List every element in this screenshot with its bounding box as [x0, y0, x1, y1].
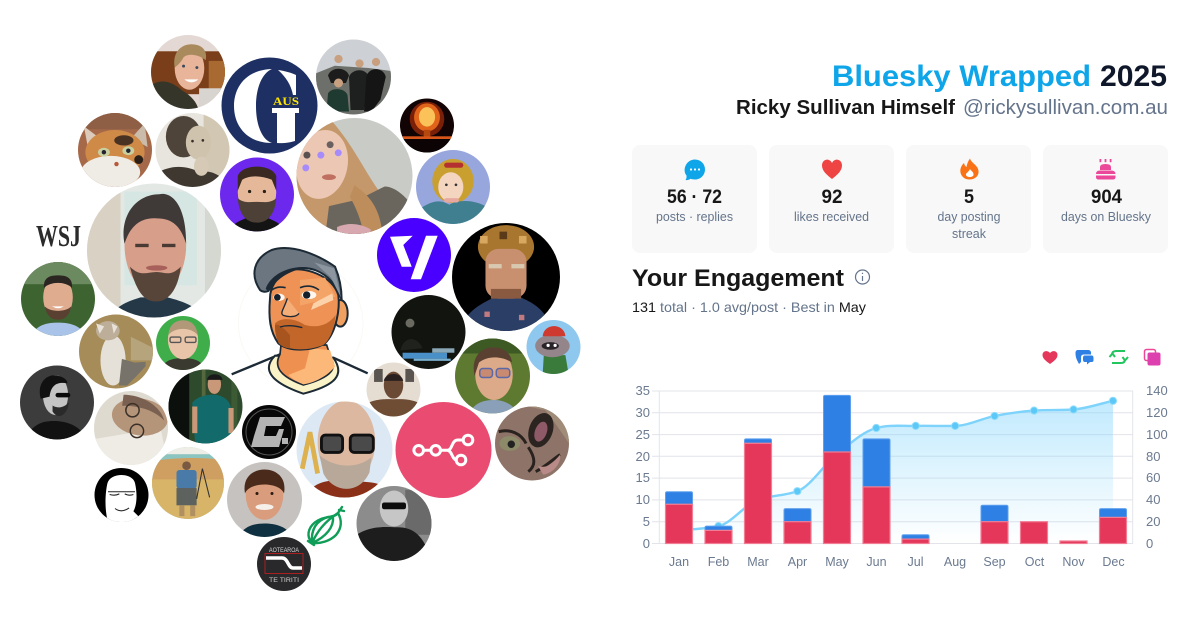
stat: posts replies number: 56 · 72 — [667, 187, 722, 208]
chart: left axis labels: 20 — [636, 449, 650, 464]
stat: streak label: day posting — [938, 209, 1000, 224]
avatar: Aotearoa logo: AOTEAROA — [269, 547, 300, 554]
display name: Ricky Sullivan Himself — [736, 97, 955, 119]
chart: left axis labels: 30 — [636, 405, 650, 420]
header: title and user — [736, 60, 1168, 119]
icon: quotes legend — [1144, 350, 1160, 366]
avatar: pixel art man — [452, 223, 560, 331]
chart: like bars — [666, 443, 1126, 544]
avatar: line drawing of man on black — [94, 468, 148, 523]
chart: right axis labels: 140 — [1146, 383, 1168, 398]
chart: right axis labels — [1146, 383, 1168, 551]
stat: streak label second line: streak — [952, 226, 986, 241]
chart: monthly engagement — [636, 383, 1168, 569]
chart: month labels: Feb — [708, 555, 729, 569]
heading: Your Engagement: Your Engagement — [632, 265, 844, 292]
chart: right axis labels: 20 — [1146, 514, 1160, 529]
card: streak — [906, 145, 1031, 253]
avatar: Guardian Australia logo: AUS — [273, 94, 299, 108]
avatar: illustrated bearded man on purple — [220, 158, 294, 232]
icon: birthday cake — [1096, 159, 1116, 180]
avatar: musician at keyboards in dark — [392, 295, 466, 369]
avatar: man in teal shirt in forest — [168, 370, 242, 444]
avatar: tabby cat looking up — [79, 314, 153, 388]
chart: month labels: Oct — [1025, 555, 1045, 569]
chart: right axis labels: 0 — [1146, 536, 1153, 551]
chart: month labels: Aug — [944, 555, 966, 569]
panel: stat cards — [632, 145, 1168, 253]
chart: left axis labels: 15 — [636, 470, 650, 485]
chart: month labels: Jul — [908, 555, 923, 569]
chart: left axis labels: 5 — [643, 514, 650, 529]
title: year: 2025 — [1100, 60, 1167, 93]
avatar: painted calico cat — [78, 113, 152, 188]
avatar: sideways face with round glasses — [94, 391, 170, 465]
avatar: man with glasses on green screen — [156, 316, 210, 370]
chart: month labels: May — [825, 555, 850, 569]
avatar: monochrome man with shades — [356, 486, 432, 561]
avatar: WSJ wordmark: WSJ — [36, 218, 81, 253]
icon: likes legend — [1042, 351, 1058, 364]
avatar: nuclear explosion — [400, 98, 454, 152]
avatar: cartoon woman with sunglasses — [416, 150, 490, 224]
chart: right axis labels: 40 — [1146, 492, 1160, 507]
chart: month labels: Nov — [1062, 555, 1085, 569]
avatar: man selfie by window shutters — [87, 184, 221, 318]
chart: cumulative line — [679, 401, 1113, 530]
avatar: man in front of frames — [366, 362, 420, 416]
avatar: sepia portrait of man — [156, 113, 230, 187]
avatar: cartoon raccoon in red hat — [526, 320, 580, 374]
icon: info — [856, 270, 870, 284]
icon: speech bubble — [685, 160, 705, 180]
avatar: grey C logo on black — [242, 405, 296, 459]
card: days on Bluesky — [1043, 145, 1168, 253]
card: likes — [769, 145, 894, 253]
chart: month labels — [669, 555, 1125, 569]
avatar: man in camo shirt — [151, 35, 225, 109]
icon: green onion logo — [308, 507, 344, 545]
chart: left axis labels: 35 — [636, 383, 650, 398]
avatar: band of four men on rocks — [316, 40, 391, 114]
chart: left axis labels: 25 — [636, 427, 650, 442]
chart: month labels: Apr — [788, 555, 807, 569]
avatar: photographer in kilt in wheat field — [152, 447, 224, 519]
avatar: white slash logo on violet — [377, 218, 451, 292]
avatar: central cartoon man with cap — [232, 248, 368, 394]
chart: left axis labels: 0 — [643, 536, 650, 551]
chart: right axis labels: 100 — [1146, 427, 1168, 442]
chart: line points — [715, 397, 1117, 530]
chart: right axis labels: 120 — [1146, 405, 1168, 420]
avatar: woman with butterfly stickers — [290, 118, 412, 234]
chart: left axis labels — [636, 383, 650, 551]
avatar: smiling man among trees — [21, 262, 95, 336]
chart: reply bars — [666, 395, 1126, 539]
avatar: smiling man grey background — [227, 462, 302, 537]
avatar: Guardian Australia logo — [222, 58, 318, 154]
chart: month labels: Jun — [866, 555, 887, 569]
stat: days number: 904 — [1091, 187, 1122, 208]
chart: right axis labels: 60 — [1146, 470, 1160, 485]
stat: streak number: 5 — [964, 187, 974, 208]
avatar: man with blue glasses among plants — [455, 338, 530, 414]
avatar: painted distorted face — [495, 406, 569, 480]
chart: month labels: Sep — [983, 555, 1006, 569]
icon: replies legend — [1076, 350, 1094, 364]
chart: month labels: Jan — [669, 555, 689, 569]
chart grid — [652, 391, 1133, 544]
avatar: Aotearoa logo — [257, 537, 311, 591]
handle: @rickysullivan.com.au — [963, 97, 1168, 119]
chart: right axis labels: 80 — [1146, 449, 1160, 464]
stat: days label: days on Bluesky — [1061, 209, 1151, 224]
chart: cumulative area — [679, 401, 1113, 544]
avatar cluster — [20, 35, 580, 591]
avatar: bald man with black glasses — [296, 401, 392, 498]
avatar: monochrome man with sunglasses — [20, 366, 94, 440]
avatar: pink node network logo — [396, 402, 492, 498]
engagement summary: 131 total · 1.0 avg/post · Best in May — [632, 299, 866, 315]
chart: left axis labels: 10 — [636, 492, 650, 507]
card: posts and replies — [632, 145, 757, 253]
avatar: Aotearoa logo: TE TIRITI — [269, 578, 299, 584]
icon: heart — [822, 160, 842, 179]
chart legend icons — [1042, 350, 1160, 366]
stat: likes number: 92 — [822, 187, 842, 208]
icon: reposts legend — [1110, 351, 1128, 363]
stat: posts replies label: posts · replies — [656, 209, 733, 224]
icon: flame — [960, 158, 979, 180]
stat: likes label: likes received — [794, 209, 869, 224]
chart: month labels: Dec — [1102, 555, 1125, 569]
chart: month labels: Mar — [747, 555, 769, 569]
title: Bluesky Wrapped: Bluesky Wrapped — [832, 60, 1091, 93]
